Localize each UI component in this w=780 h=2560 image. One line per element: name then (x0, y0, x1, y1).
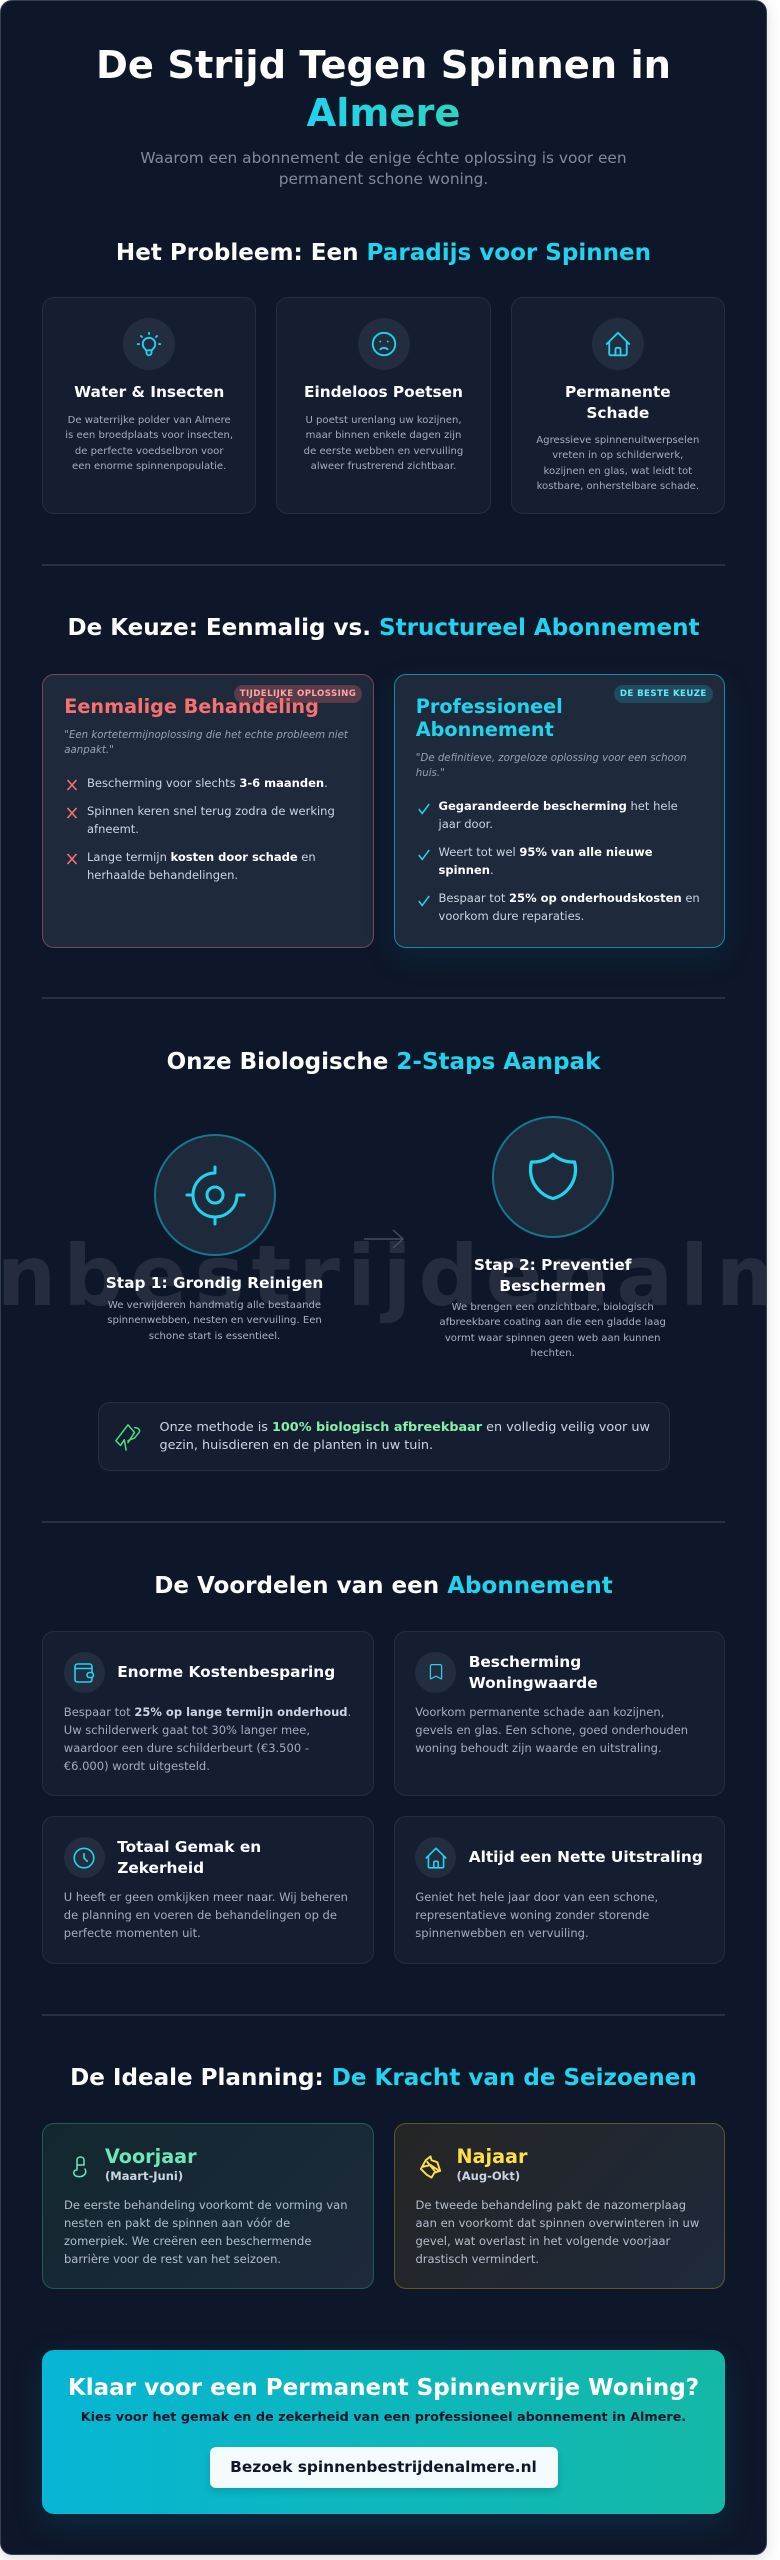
card text (415, 1705, 688, 1755)
step text: We verwijderen handmatig alle bestaande (108, 1300, 321, 1311)
list item: jaar door. (438, 817, 493, 831)
card title: Woningwaarde (469, 1674, 598, 1692)
icon: green leaf (115, 1424, 140, 1451)
subtitle (140, 149, 627, 188)
icon: house (592, 318, 644, 370)
step text: We brengen een onzichtbare, biologisch (452, 1302, 654, 1313)
cta subtitle: Kies voor het gemak en de zekerheid van een professioneel abonnement in Almere. (81, 2410, 686, 2425)
card text: de perfecte voedselbron voor (75, 446, 224, 457)
icon: sad face (358, 318, 410, 370)
step 2 (439, 1116, 666, 1359)
icon: sprout (73, 2156, 86, 2178)
panel: kostenbesparing (42, 1631, 374, 1796)
season text: zomerpiek. We creëren een beschermende (64, 2234, 311, 2248)
card text: alweer frustrerend zichtbaar. (311, 461, 456, 472)
quote: "De definitieve, zorgeloze oplossing voor een schoon (416, 753, 687, 764)
card text (65, 415, 233, 472)
callout: biologisch (98, 1402, 670, 1471)
card text: is een broedplaats voor insecten, (65, 430, 233, 441)
card text: U poetst urenlang uw kozijnen, (305, 415, 462, 426)
title (96, 43, 671, 136)
panel: permanente schade (511, 297, 725, 514)
card text (64, 1890, 348, 1940)
list item: Weert tot wel 95% van alle nieuwe (438, 845, 653, 859)
card title: Eindeloos Poetsen (304, 383, 463, 401)
subtitle: permanent schone woning. (279, 170, 488, 188)
season period: (Maart-Juni) (105, 2169, 183, 2183)
icon: target (154, 1134, 276, 1256)
panel: gemak (42, 1816, 374, 1964)
card text: De waterrijke polder van Almere (68, 415, 231, 426)
card text: gevels en glas. Een schone, goed onderhouden (415, 1723, 688, 1737)
season text (416, 2198, 699, 2266)
card text (415, 1890, 658, 1940)
card title: Bescherming (469, 1653, 581, 1671)
icon: shield (492, 1116, 614, 1238)
step 1 (106, 1134, 323, 1342)
card text: de eerste webben en vervuiling (304, 446, 463, 457)
quote (64, 730, 348, 756)
icon: house (415, 1837, 456, 1878)
list item: Bespaar tot 25% op onderhoudskosten en (438, 891, 700, 905)
card title: Enorme Kostenbesparing (117, 1663, 335, 1681)
card text: kozijnen en glas, wat leidt tot (544, 466, 692, 477)
step text (107, 1300, 322, 1342)
card title: Totaal Gemak en (117, 1838, 261, 1856)
badge (614, 685, 713, 703)
season title: Najaar (456, 2145, 527, 2168)
card title: Zekerheid (117, 1858, 204, 1876)
card text: waardoor een dure schilderbeurt (€3.500 - (64, 1741, 309, 1755)
icon: leaf (420, 2155, 442, 2179)
panel: water en insecten (42, 297, 256, 514)
list item: Gegarandeerde bescherming het hele (438, 799, 678, 813)
card text: spinnenwebben en vervuiling. (415, 1926, 589, 1940)
list item (418, 799, 678, 831)
icon: wallet (64, 1652, 105, 1693)
list item (418, 891, 700, 923)
panel: uitstraling (394, 1816, 725, 1964)
season text: aan en voorkomt dat spinnen overwinteren in uw (416, 2216, 699, 2230)
badge (234, 685, 362, 703)
card text: U heeft er geen omkijken meer naar. Wij beheren (64, 1890, 348, 1904)
card title: Water & Insecten (74, 383, 224, 401)
list item: Lange termijn kosten door schade en (87, 850, 316, 864)
cta title: Klaar voor een Permanent Spinnenvrije Woning? (68, 2375, 699, 2401)
card text: maar binnen enkele dagen zijn (306, 430, 461, 441)
step text: schone start is essentieel. (149, 1331, 280, 1342)
heading: keuze: De Keuze: Eenmalig vs. Structureel Abonnement (67, 615, 700, 641)
list item (418, 845, 653, 877)
season text: De eerste behandeling voorkomt de vorming van (64, 2198, 348, 2212)
list item: Bescherming voor slechts 3-6 maanden. (87, 776, 328, 790)
season period: (Aug-Okt) (456, 2169, 520, 2183)
panel title: Eenmalige Behandeling (64, 695, 319, 718)
step title: Beschermen (499, 1276, 606, 1294)
heading: voordelen: De Voordelen van een Abonnement (154, 1573, 613, 1599)
card text: vreten in op schilderwerk, (552, 450, 683, 461)
card text: representatieve woning zonder storende (415, 1908, 649, 1922)
quote: huis." (416, 768, 445, 779)
card text: perfecte momenten uit. (64, 1926, 201, 1940)
step text: hechten. (531, 1348, 575, 1359)
quote: aanpakt." (64, 745, 114, 756)
heading: probleem: Het Probleem: Een Paradijs voor Spinnen (116, 240, 651, 266)
season text (64, 2198, 348, 2266)
season text: barrière voor de rest van het seizoen. (64, 2252, 281, 2266)
step title: Stap 2: Preventief (474, 1256, 631, 1274)
step title: Stap 1: Grondig Reinigen (106, 1274, 323, 1292)
panel title: Abonnement (416, 718, 554, 741)
card text: €6.000) wordt uitgesteld. (64, 1759, 210, 1773)
step text: vormt waar spinnen geen web aan kunnen (445, 1333, 661, 1344)
callout text: gezin, huisdieren en de planten in uw tuin. (160, 1438, 433, 1453)
card text (64, 1705, 351, 1773)
step text: spinnenwebben, nesten en vervuiling. Een (107, 1315, 322, 1326)
icon: clock (64, 1837, 105, 1878)
card text: de planning en voeren de behandelingen op de (64, 1908, 337, 1922)
call to action (42, 2350, 725, 2514)
step title (474, 1256, 632, 1294)
panel title (416, 695, 563, 741)
panel: najaar (394, 2123, 725, 2289)
list item: Spinnen keren snel terug zodra de werking (87, 804, 335, 818)
callout text: Onze methode is 100% biologisch afbreekbaar en volledig veilig voor uw (160, 1420, 650, 1435)
arrow (364, 1230, 404, 1248)
cta button: Bezoek spinnenbestrijdenalmere.nl (230, 2458, 537, 2476)
card text: Geniet het hele jaar door van een schone, (415, 1890, 658, 1904)
callout text (160, 1420, 650, 1453)
card text: Bespaar tot 25% op lange termijn onderhoud. (64, 1705, 351, 1719)
list item: afneemt. (87, 822, 139, 836)
icon: bookmark (415, 1652, 456, 1693)
list item: voorkom dure reparaties. (438, 909, 584, 923)
list item: herhaalde behandelingen. (87, 868, 238, 882)
card title: Altijd een Nette Uitstraling (469, 1848, 703, 1866)
card text: kostbare, onherstelbare schade. (537, 481, 699, 492)
card text: een enorme spinnenpopulatie. (72, 461, 226, 472)
icon: lightbulb (123, 318, 175, 370)
list item: spinnen. (438, 863, 494, 877)
title: De Strijd Tegen Spinnen in (96, 43, 671, 88)
heading: planning: De Ideale Planning: De Kracht van de Seizoenen (70, 2065, 697, 2091)
card title (565, 383, 671, 422)
heading: aanpak: Onze Biologische 2-Staps Aanpak (167, 1049, 600, 1075)
cta button (210, 2447, 558, 2488)
card text (536, 435, 699, 492)
card text: Voorkom permanente schade aan kozijnen, (415, 1705, 664, 1719)
list item (67, 850, 316, 882)
season title: Voorjaar (105, 2145, 197, 2168)
panel: professioneel abonnement (394, 674, 725, 948)
badge: TIJDELIJKE OPLOSSING (240, 689, 356, 699)
card text: Uw schilderwerk gaat tot 30% langer mee, (64, 1723, 310, 1737)
card title: Permanente (565, 383, 671, 401)
season text: drastisch vermindert. (416, 2252, 539, 2266)
badge: DE BESTE KEUZE (620, 689, 707, 699)
subtitle: Waarom een abonnement de enige échte oplossing is voor een (140, 149, 627, 167)
card title (469, 1653, 598, 1692)
season text: De tweede behandeling pakt de nazomerplaag (416, 2198, 686, 2212)
panel: eindeloos poetsen (276, 297, 491, 514)
card text: woning behoudt zijn waarde en uitstraling. (415, 1741, 662, 1755)
card text (304, 415, 463, 472)
title: Almere (307, 91, 460, 136)
season text: gevel, wat overlast in het volgende voorjaar (416, 2234, 670, 2248)
quote: "Een kortetermijnoplossing die het echte probleem niet (64, 730, 348, 741)
panel title: Professioneel (416, 695, 563, 718)
card text: Agressieve spinnenuitwerpselen (536, 435, 699, 446)
list item (67, 804, 335, 836)
panel: eenmalige behandeling (42, 674, 374, 948)
quote (416, 753, 687, 779)
step text: afbreekbare coating aan die een gladde laag (439, 1317, 666, 1328)
season text: nesten en pakt de spinnen aan vóór de (64, 2216, 290, 2230)
card title (117, 1838, 261, 1876)
panel: woningwaarde (394, 1631, 725, 1796)
step text (439, 1302, 666, 1359)
panel: voorjaar (42, 2123, 374, 2289)
card title: Schade (586, 404, 649, 422)
